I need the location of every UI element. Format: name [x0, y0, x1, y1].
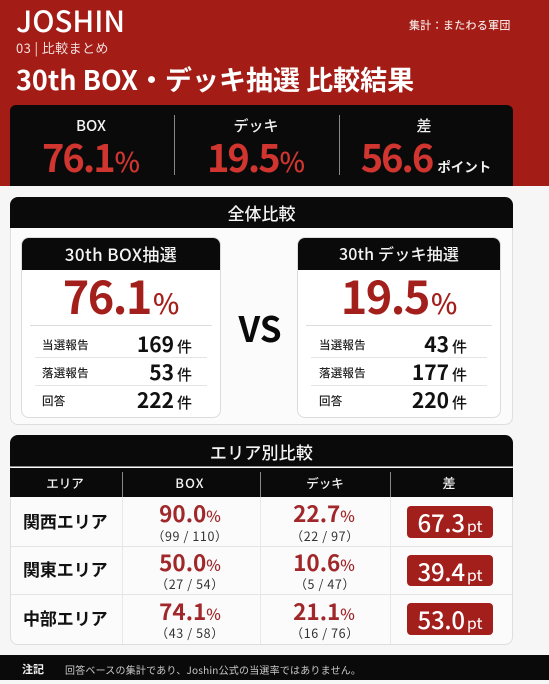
panel: area comparison [10, 435, 513, 645]
heading: area comparison [10, 435, 513, 467]
heading: overall comparison: 全体比較 [228, 200, 296, 225]
row: losses: 177件 [412, 357, 467, 387]
row: Chubu: 53.0pt [417, 601, 483, 636]
summary: BOX: 76.1% [42, 128, 140, 183]
summary: difference: 56.6 ポイント [361, 128, 491, 183]
big percentage: 76.1% [63, 262, 179, 327]
brand name: JOSHIN [16, 0, 125, 41]
header: area: エリア [46, 473, 84, 492]
heading: overall comparison [10, 197, 513, 228]
note text: 回答ベースの集計であり、Joshin公式の当選率ではありません。 [65, 662, 361, 677]
summary: deck: デッキ [233, 115, 279, 136]
row: responses: 220件 [412, 385, 467, 415]
heading: area comparison: エリア別比較 [210, 439, 313, 464]
row: wins: 169件 [137, 329, 192, 359]
summary: difference: 差 [416, 115, 432, 136]
row: losses [319, 357, 467, 387]
VS mark: VS [238, 302, 282, 353]
row: Chubu: 74.1% [159, 595, 221, 627]
card title: 30th BOX抽選 [65, 241, 177, 266]
row: responses [42, 385, 192, 415]
row: Kanto: （27 / 54） [156, 574, 224, 593]
row: wins: 43件 [424, 329, 467, 359]
row: Kanto: （5 / 47） [294, 574, 356, 593]
table header row [10, 468, 513, 497]
credit: 集計：またわる軍団 [409, 17, 511, 33]
card title: 30th デッキ抽選 [339, 241, 459, 265]
header: difference: 差 [442, 473, 456, 492]
main title: 30th BOX・デッキ抽選 比較結果 [16, 59, 414, 98]
row: Kansai [23, 497, 493, 545]
header: box: BOX [175, 473, 205, 492]
row: Kansai: 67.3pt [417, 504, 483, 539]
row: losses: 落選報告 [319, 365, 366, 381]
card: deck lottery [297, 237, 501, 418]
row: responses: 回答 [319, 393, 342, 409]
footer note [0, 655, 549, 680]
row: Kanto: 39.4pt [417, 553, 483, 588]
row: Kansai: （22 / 97） [291, 526, 359, 545]
row: wins [319, 329, 467, 359]
header: deck: デッキ [306, 473, 344, 492]
big percentage: 19.5% [341, 262, 457, 327]
row: wins [42, 329, 192, 359]
row: wins: 当選報告 [319, 337, 366, 353]
note label: 注記 [22, 661, 44, 677]
row: Kanto: 10.6% [293, 546, 355, 578]
card: BOX lottery [21, 237, 221, 418]
row: responses: 222件 [137, 385, 192, 415]
row: Kansai: 関西エリア [23, 508, 108, 533]
row: Chubu: （43 / 58） [156, 623, 224, 642]
row: Kansai: 22.7% [293, 497, 355, 529]
row: Chubu: 中部エリア [23, 605, 108, 630]
row: responses [319, 385, 467, 415]
row: responses: 回答 [42, 393, 65, 409]
row: losses [42, 357, 192, 387]
row: Kanto: 50.0% [159, 546, 221, 578]
card title [21, 237, 221, 270]
row: wins: 当選報告 [42, 337, 89, 353]
section label: 03 | 比較まとめ [16, 38, 109, 57]
row: Chubu: 21.1% [293, 595, 355, 627]
row: Kanto [23, 546, 493, 593]
row: Chubu: （16 / 76） [291, 623, 359, 642]
row: Kanto: 関東エリア [23, 556, 108, 581]
row: losses: 落選報告 [42, 365, 89, 381]
row: Kansai: （99 / 110） [152, 526, 228, 545]
row: losses: 53件 [149, 357, 192, 387]
header band [0, 0, 549, 186]
card title [297, 237, 501, 270]
summary: BOX: BOX [76, 115, 106, 136]
panel: overall comparison [10, 197, 513, 425]
summary: deck: 19.5% [207, 128, 305, 183]
row: Kansai: 90.0% [159, 497, 221, 529]
row: Chubu [23, 595, 493, 642]
summary bar [10, 105, 513, 186]
